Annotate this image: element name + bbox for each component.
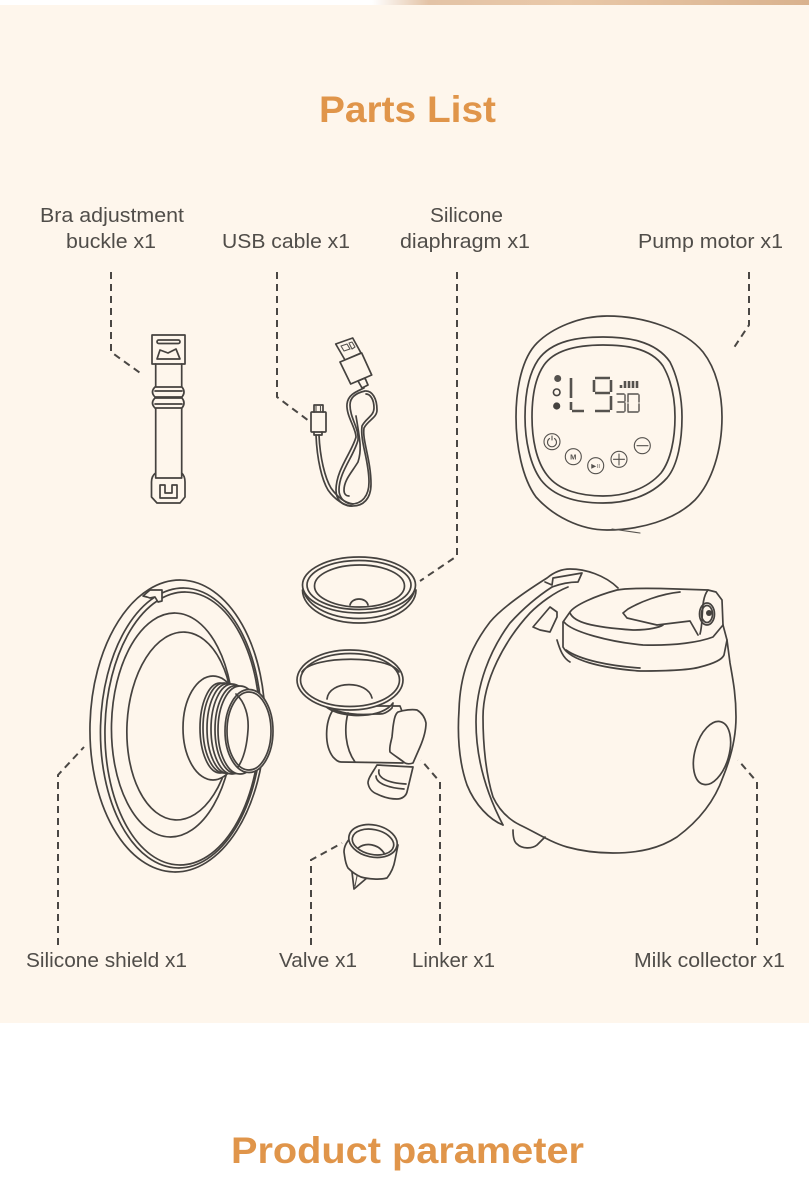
leader line: shield — [58, 747, 84, 945]
icon: valve — [344, 820, 400, 889]
label: Bra adjustment buckle: buckle x1 — [66, 231, 156, 253]
icon: silicone shield — [86, 578, 273, 874]
LCD battery bars — [621, 381, 637, 388]
top photo strip — [0, 0, 809, 5]
label: Bra adjustment buckle — [40, 205, 184, 253]
heading: Product parameter: Product parameter — [231, 1130, 584, 1171]
label: Silicone diaphragm: diaphragm x1 — [400, 231, 530, 253]
shield neck — [183, 676, 273, 780]
leader line: buckle — [111, 272, 143, 375]
label: Pump motor: Pump motor x1 — [638, 231, 783, 253]
status icons — [553, 375, 561, 410]
buttons: M — [570, 452, 576, 462]
LCD digits L9 — [571, 378, 611, 411]
icon: bra adjustment buckle — [152, 335, 185, 503]
label: Silicone diaphragm — [400, 205, 530, 253]
icon: milk collector — [458, 569, 737, 853]
leader line: linker — [421, 760, 440, 945]
icon: silicone diaphragm — [302, 557, 416, 623]
leader line: valve — [311, 843, 342, 945]
label: Valve: Valve x1 — [279, 950, 357, 972]
label: USB cable: USB cable x1 — [222, 231, 350, 253]
collector side button — [687, 717, 737, 789]
collector foot — [513, 830, 545, 848]
leader line: diaphragm — [420, 272, 457, 581]
label: Silicone diaphragm: Silicone — [430, 205, 503, 227]
label: Milk collector: Milk collector x1 — [634, 950, 785, 972]
label: Linker: Linker x1 — [412, 950, 495, 972]
icon: linker — [297, 650, 426, 799]
leader line: milk collector — [738, 760, 757, 945]
collector lid — [563, 588, 727, 671]
title: Parts List: Parts List — [319, 89, 496, 130]
icon: USB cable — [311, 338, 377, 506]
LCD digits 30 — [617, 394, 639, 412]
leader line: pump motor — [733, 272, 749, 349]
buttons: ▶॥ — [591, 463, 600, 470]
label: Silicone shield: Silicone shield x1 — [26, 950, 187, 972]
leader line: USB cable — [277, 272, 309, 421]
icon: pump motor — [516, 316, 722, 533]
shield notch — [143, 590, 162, 602]
label: Bra adjustment buckle: Bra adjustment — [40, 205, 184, 227]
buttons — [544, 434, 650, 474]
